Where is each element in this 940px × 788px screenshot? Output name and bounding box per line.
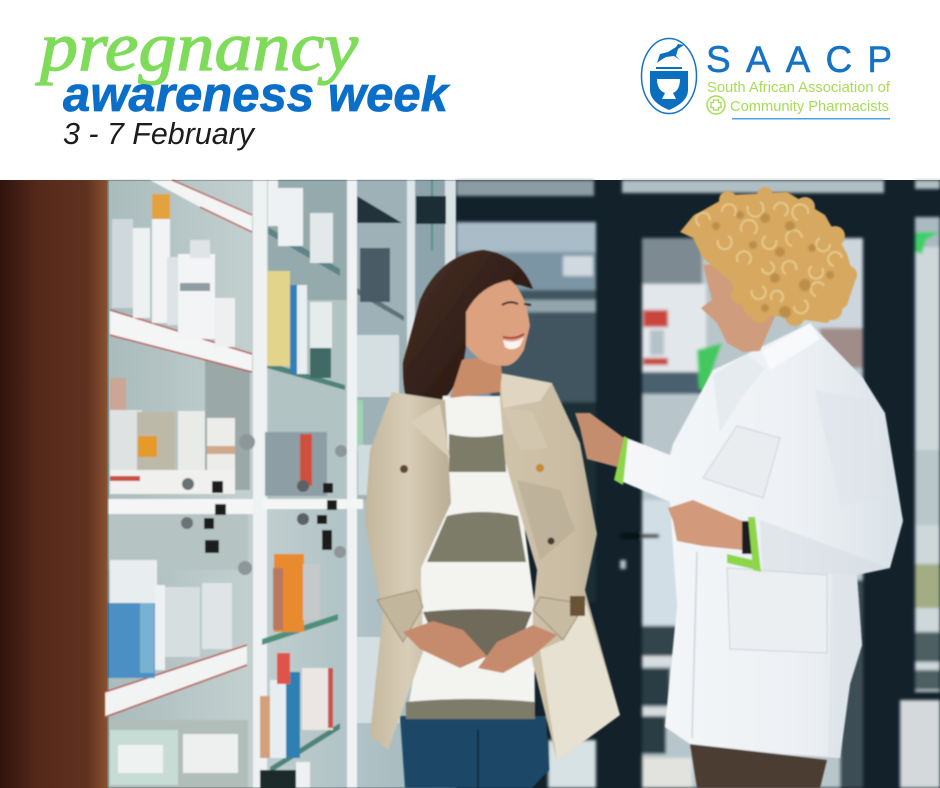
door pane [642, 238, 863, 788]
icon: crest [642, 38, 696, 114]
jeans [400, 716, 549, 788]
green cuff right [748, 517, 761, 572]
date: 3 - 7 February [63, 116, 256, 151]
white coat [623, 323, 903, 758]
wordmark: SAACP [706, 39, 892, 80]
collars [410, 404, 450, 458]
tee and collar [737, 358, 762, 397]
trousers [690, 744, 827, 788]
wooden cabinet side [0, 180, 108, 788]
left hand [403, 621, 487, 668]
glass shelving [105, 180, 456, 788]
hand on shoulder [575, 413, 624, 467]
door handle [620, 534, 659, 538]
products [108, 180, 400, 788]
person: pregnant woman [365, 250, 620, 788]
coat right [500, 373, 620, 761]
title line: awareness week: awareness week [63, 68, 451, 122]
logo: SAACP [642, 38, 892, 120]
right pane [915, 217, 940, 692]
dark shelves at right [357, 196, 402, 223]
title line: pregnancy: pregnancy [35, 9, 359, 86]
white shelves [150, 180, 252, 232]
curly hair [680, 187, 857, 326]
hair [403, 250, 533, 425]
right hand [478, 625, 557, 673]
pockets [703, 426, 780, 498]
striped shirt [406, 396, 535, 719]
person: pharmacist [575, 187, 903, 788]
title: pregnancy awareness week [35, 9, 451, 151]
middle pane [456, 222, 596, 402]
glass shelves [268, 227, 340, 276]
cuffs [377, 590, 423, 642]
icon: cross [707, 96, 725, 114]
tagline line 1: South African Association of [707, 79, 891, 96]
background: doors and glass [456, 180, 940, 788]
green cuff left [614, 436, 628, 485]
neck and face [701, 262, 777, 352]
photo: pharmacy scene [0, 180, 940, 788]
buttons [400, 465, 408, 473]
hand holding coat [668, 500, 747, 550]
neck [450, 355, 502, 398]
coat left [365, 392, 451, 750]
header background [0, 0, 940, 180]
face [466, 280, 530, 366]
watch [742, 521, 752, 554]
keys and locks [181, 434, 347, 575]
uprights [253, 180, 267, 788]
tagline line 2: Community Pharmacists [730, 98, 889, 115]
